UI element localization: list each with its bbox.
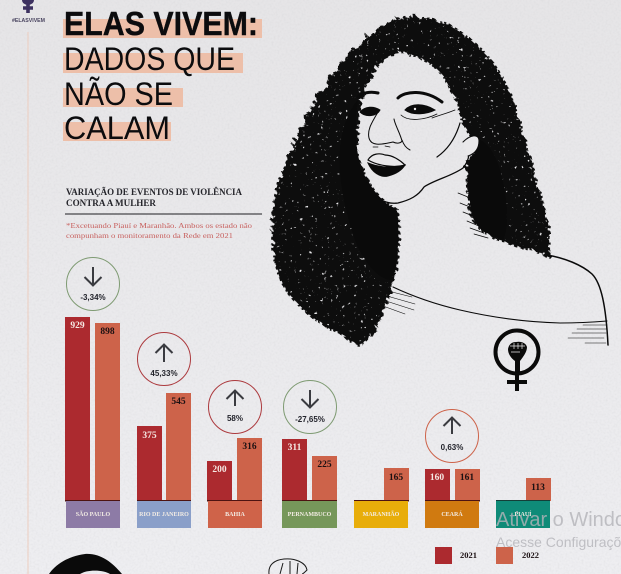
chart heading: CONTRA A MULHER xyxy=(66,198,156,208)
bar group: Ceará: 161 xyxy=(460,473,474,483)
callout: Ceará 0,63% xyxy=(426,410,478,462)
chart heading: VARIAÇÃO DE EVENTOS DE VIOLÊNCIA xyxy=(66,187,242,197)
icon: female symbol hashtag: #ELASVIVEM xyxy=(12,18,45,24)
bar group: Piauí: PIAUÍ xyxy=(514,510,532,518)
bar group: São Paulo: 929 xyxy=(70,321,85,331)
legend: 2021 xyxy=(460,550,477,560)
bar group: Bahia: BAHIA xyxy=(225,512,246,518)
hair xyxy=(273,18,549,343)
face xyxy=(358,92,608,345)
bar group: Maranhão xyxy=(354,468,409,528)
callout: Rio de Janeiro 45,33% xyxy=(138,332,190,386)
watermark: activate windows xyxy=(496,509,621,550)
footnote: *Excetuando Piauí e Maranhão. Ambos os estado não xyxy=(66,221,252,230)
title: CALAM xyxy=(64,110,170,146)
bar group: São Paulo xyxy=(65,317,120,528)
bar group: Rio de Janeiro: RIO DE JANEIRO xyxy=(139,512,189,518)
neck hatching xyxy=(458,193,488,238)
illustration: cropped hair at bottom xyxy=(49,554,122,574)
shoulder xyxy=(547,255,608,345)
callout: São Paulo -3,34% xyxy=(66,258,120,310)
bar group: Piauí: 113 xyxy=(531,483,545,493)
callout: São Paulo -3,34%: -3,34% xyxy=(80,293,106,302)
icon: cropped fist at bottom xyxy=(269,559,307,574)
title: NÃO SE xyxy=(64,75,173,112)
bar group: São Paulo: SÃO PAULO xyxy=(76,510,111,518)
bar group: Ceará: CEARÁ xyxy=(441,510,463,518)
bar group: Ceará xyxy=(425,469,480,528)
legend: 2022 xyxy=(522,550,539,560)
illustration: woman portrait xyxy=(273,18,608,345)
bar group: Bahia xyxy=(207,438,262,528)
bar group: Maranhão: MARANHÃO xyxy=(363,510,400,518)
bar group: Pernambuco: 225 xyxy=(317,460,332,470)
chart heading xyxy=(65,187,262,214)
bar group: Rio de Janeiro: 545 xyxy=(171,397,186,407)
bar group: Pernambuco xyxy=(282,439,337,528)
bar group: Rio de Janeiro xyxy=(137,393,191,528)
bar group: Bahia: 316 xyxy=(242,442,257,452)
callout: Ceará 0,63%: 0,63% xyxy=(441,443,463,452)
title xyxy=(63,5,262,146)
footnote xyxy=(66,221,252,240)
title: ELAS VIVEM: xyxy=(64,5,258,42)
footnote: compunham o monitoramento da Rede em 2021 xyxy=(66,231,233,240)
solid hair masses xyxy=(340,100,507,280)
callout: Bahia 58%: 58% xyxy=(227,414,243,423)
callout: Rio de Janeiro 45,33%: 45,33% xyxy=(150,369,178,378)
bar group: Bahia: 200 xyxy=(212,465,227,475)
callout: Pernambuco -27,65%: -27,65% xyxy=(295,415,325,424)
bar group: Piauí xyxy=(496,478,551,528)
title: DADOS QUE xyxy=(64,41,235,77)
bar group: Maranhão: 165 xyxy=(389,473,403,483)
legend xyxy=(435,547,539,564)
callout: Bahia 58% xyxy=(208,380,262,434)
bar group: São Paulo: 898 xyxy=(100,327,115,337)
bar group: Rio de Janeiro: 375 xyxy=(142,431,157,441)
bar group: Pernambuco: PERNAMBUCO xyxy=(288,512,332,518)
callout: Pernambuco -27,65% xyxy=(284,380,336,434)
icon: female symbol hashtag xyxy=(12,0,45,24)
icon: feminist fist symbol xyxy=(496,330,538,391)
bar group: Ceará: 160 xyxy=(430,473,444,483)
bar group: Pernambuco: 311 xyxy=(288,443,302,453)
